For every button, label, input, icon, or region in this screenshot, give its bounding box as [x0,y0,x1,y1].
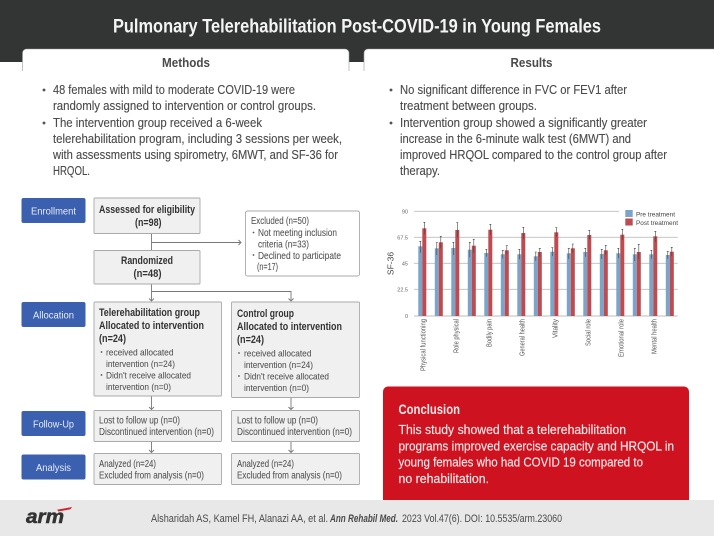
box: control analysis [232,454,360,484]
legend [625,210,678,227]
box: telerehabilitation group allocation: intervention (n=24) [106,359,175,370]
box: control group allocation: (n=24) [237,334,264,346]
box: control follow-up: Lost to follow up (n=0) [237,416,318,426]
methods bullet list: telerehabilitation program, including 3 sessions per week, [53,132,342,146]
box: telerehabilitation follow-up [94,410,222,442]
footer band [0,500,714,536]
citation: Ann Rehabil Med. [329,513,398,525]
box: excluded: Declined to participate [258,251,341,262]
results bullet list: therapy. [400,164,440,178]
category labels: Mental health [652,319,658,354]
box: randomized [94,250,200,284]
citation: Alsharidah AS, Kamel FH, Alanazi AA, et al. [151,513,328,525]
title: Pulmonary Telerehabilitation Post-COVID-19 in Young Females [113,16,601,38]
y axis title: SF-36 [386,252,396,275]
box: telerehabilitation analysis: Excluded from analysis (n=0) [99,470,204,482]
stage label: allocation [22,302,86,327]
category labels: Vitality [552,319,560,338]
box: assessed for eligibility [94,198,200,234]
box: randomized: Randomized [121,255,173,267]
stage label: follow-up: Follow-Up [33,418,74,430]
stage label: enrollment: Enrollment [31,206,76,218]
category labels: Physical functioning [420,319,428,371]
results bullet list: improved HRQOL compared to the control group after [400,148,667,162]
box: control analysis: Excluded from analysis (n=0) [237,470,342,482]
box: control group allocation: intervention (n=0) [244,383,309,394]
results bullet list: Intervention group showed a significantly greater [400,116,647,130]
methods bullet list: The intervention group received a 6-week [53,116,263,130]
box: excluded: Not meeting inclusion [258,228,337,239]
box: excluded [246,211,360,276]
legend: Post treatment [636,220,678,227]
y axis ticks: 0 [405,314,408,320]
panel: results [364,49,714,178]
conclusion text [398,422,674,486]
post treatment bars [422,228,674,316]
box: telerehabilitation group allocation: received allocated [106,348,174,358]
results bullet list: No significant difference in FVC or FEV1 after [400,83,627,97]
citation: 2023 Vol.47(6). DOI: 10.5535/arm.23060 [402,513,562,525]
methods bullet list: 48 females with mild to moderate COVID-19 were [53,83,295,97]
box: randomized: (n=48) [134,268,162,280]
box: telerehabilitation group allocation [94,302,222,396]
bar chart: SF-36 [386,209,678,371]
box: assessed for eligibility: (n=98) [135,217,162,229]
results heading: Results [510,55,552,70]
category labels: Role physical [454,319,460,353]
box: control group allocation: intervention (n=24) [244,360,313,371]
box: telerehabilitation group allocation: Didn't receive allocated [106,370,191,382]
box: telerehabilitation group allocation: Telerehabilitation group [99,307,200,319]
box: excluded: (n=17) [257,262,278,273]
stage label: analysis [22,454,86,480]
stage label: enrollment [22,198,86,223]
gridlines [414,211,678,316]
y axis ticks: 45 [402,261,408,267]
y axis ticks [397,209,408,320]
box: control group allocation [232,302,360,398]
flow diagram [22,198,360,484]
methods bullet list: HRQOL. [53,164,90,178]
panel: conclusion [383,386,689,500]
category labels: General health [520,319,526,356]
box: telerehabilitation analysis: Analyzed (n=24) [99,459,156,470]
stage label: follow-up [22,411,86,436]
y axis ticks: 22.5 [397,287,408,293]
conclusion text: young females who had COVID 19 compared to [398,454,643,470]
box: control group allocation: Didn't receive allocated [244,372,329,382]
box: control follow-up [232,410,360,442]
results bullet list: treatment between groups. [400,99,537,113]
box: control follow-up: Discontinued intervention (n=0) [237,427,352,438]
category labels: Bodily pain [486,319,494,347]
box: telerehabilitation group allocation: (n=24) [99,333,126,345]
conclusion text: programs improved exercise capacity and HRQOL in [398,438,674,454]
conclusion text: no rehabilitation. [398,471,489,486]
header band [0,0,714,62]
box: control group allocation: received allocated [244,348,312,360]
box: control analysis: Analyzed (n=24) [237,459,294,470]
methods bullet list [43,83,342,178]
box: excluded: Excluded (n=50) [251,216,309,227]
y axis ticks: 67.5 [397,235,408,241]
category labels [420,319,658,371]
logo: arm: arm [26,507,64,528]
box: telerehabilitation analysis [94,454,222,484]
results bullet list [390,83,667,178]
box: telerehabilitation group allocation: Allocated to intervention [99,320,204,332]
y axis ticks: 90 [402,209,408,215]
methods bullet list: with assessments using spirometry, 6MWT, and SF-36 for [52,148,338,162]
category labels: Emotional role [618,319,626,357]
stage label: analysis: Analysis [36,462,71,474]
stage label: allocation: Allocation [33,310,74,322]
box: assessed for eligibility: Assessed for eligibility [99,204,196,216]
box: telerehabilitation follow-up: Lost to follow up (n=0) [99,416,180,426]
box: telerehabilitation group allocation: intervention (n=0) [106,382,171,393]
box: control group allocation: Allocated to intervention [237,321,342,333]
conclusion heading: Conclusion [398,402,460,417]
box: telerehabilitation follow-up: Discontinued intervention (n=0) [99,427,214,438]
category labels: Social role [586,319,592,346]
results bullet list: increase in the 6-minute walk test (6MWT) and [400,132,631,146]
pre treatment bars [418,246,670,316]
conclusion text: This study showed that a telerehabilitation [398,422,626,437]
methods heading: Methods [162,55,210,70]
box: control group allocation: Control group [237,308,294,320]
error bars [419,241,669,261]
legend: Pre treatment [636,212,675,218]
box: excluded: criteria (n=33) [258,240,309,250]
methods bullet list: randomly assigned to intervention or control groups. [53,99,316,113]
panel: methods [22,49,349,178]
arrows [149,234,294,452]
